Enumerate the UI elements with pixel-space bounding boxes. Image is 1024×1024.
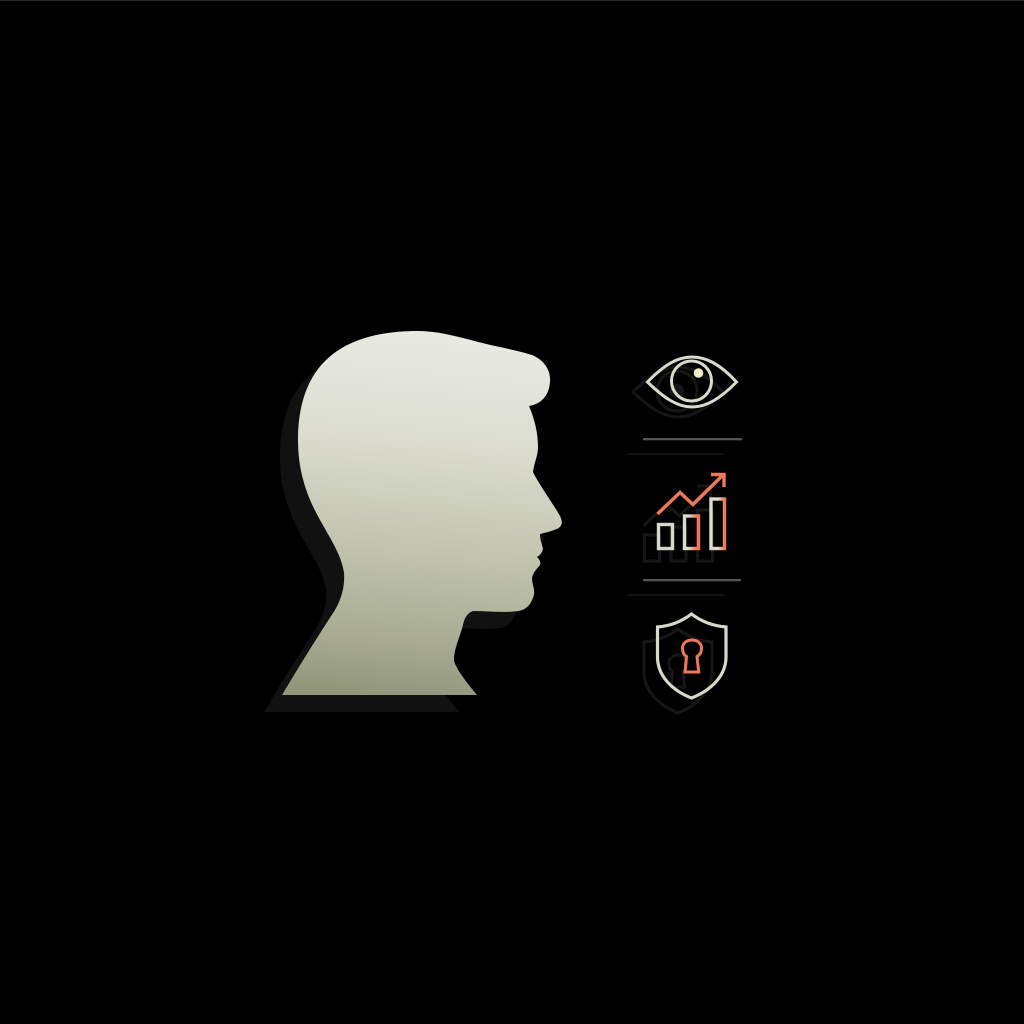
shield outline	[658, 614, 726, 698]
icon: eye	[633, 357, 736, 417]
eye shadow	[633, 367, 723, 417]
divider 2	[643, 579, 741, 581]
icon: shield with keyhole	[644, 614, 726, 713]
trend arrow	[658, 474, 724, 514]
bar 3	[711, 499, 724, 548]
chart shadow	[644, 486, 712, 561]
keyhole	[682, 640, 702, 672]
icon: rising bar chart	[644, 474, 724, 561]
bar 2	[684, 516, 698, 548]
shield shadow	[644, 629, 712, 713]
divider 1	[643, 438, 742, 440]
bar 1	[658, 524, 672, 548]
head silhouette shadow	[264, 348, 544, 712]
head silhouette	[282, 331, 562, 695]
eye highlight	[694, 368, 703, 378]
iris	[672, 361, 712, 401]
eye outline	[648, 357, 736, 407]
